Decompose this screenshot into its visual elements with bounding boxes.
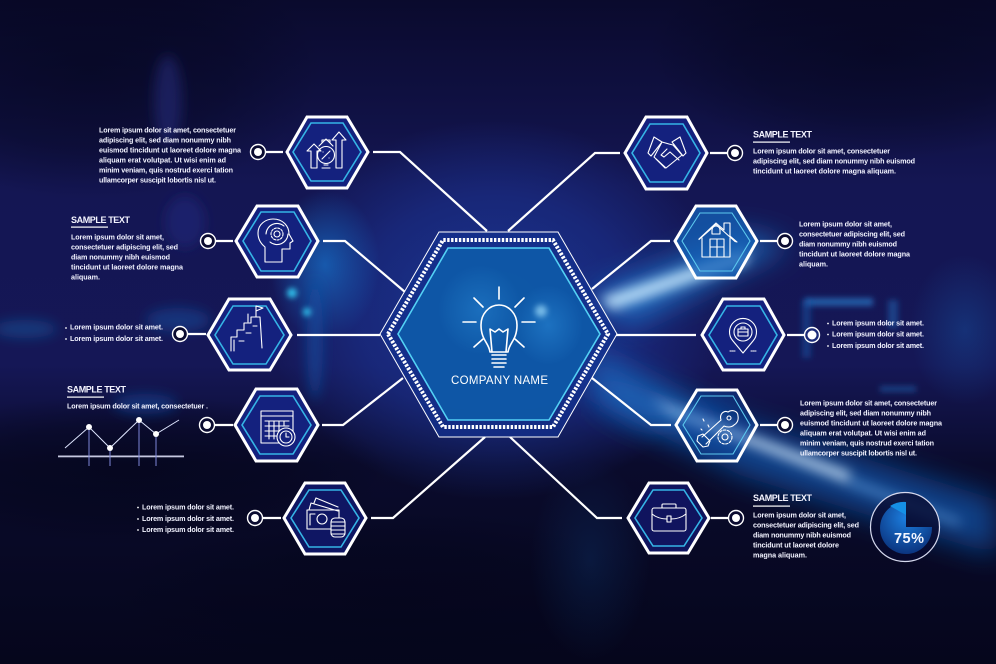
text block: right 5 — [753, 493, 859, 560]
icon: banknotes and coins — [307, 498, 345, 537]
text block: right 5: magna aliquam. — [753, 550, 807, 560]
icon: handshake — [648, 137, 686, 168]
text block: right 4: adipiscing elit, sed diam nonummy nibh — [800, 408, 931, 418]
text block: right 2: consectetuer adipiscing elit, sed — [799, 230, 905, 238]
text block: right 1: adipiscing elit, sed diam nonummy nibh euismod — [753, 156, 915, 166]
text block: left 4: Lorem ipsum dolor sit amet, consectetuer . — [67, 402, 208, 410]
node: key and gear, right 4 — [676, 390, 792, 461]
node: handshake, right 1 — [625, 117, 742, 189]
text block: left 2: SAMPLE TEXT — [71, 215, 130, 225]
icon: location pin with briefcase — [730, 318, 756, 353]
text block: right 2: diam nonummy nibh euismod — [799, 240, 897, 248]
text block: left 2: Lorem ipsum dolor sit amet, — [71, 232, 164, 242]
text block: right 5: diam nonummy nibh euismod — [753, 530, 851, 540]
text block: left 1: ullamcorper suscipit lobortis nisl ut. — [99, 176, 216, 184]
pie chart: 75%: 75% — [894, 531, 924, 547]
text block: left 2: tincidunt ut laoreet dolore magna — [71, 262, 184, 272]
text block: right 4: Lorem ipsum dolor sit amet, consectetuer — [800, 398, 937, 408]
text block: right 2: aliquam. — [799, 260, 828, 268]
text block: right 1: SAMPLE TEXT — [753, 130, 812, 140]
text block: right 2: Lorem ipsum dolor sit amet, — [799, 220, 892, 228]
text block: right 2: tincidunt ut laoreet dolore magna — [799, 250, 911, 258]
text block: left 1: Lorem ipsum dolor sit amet, consectetuer — [99, 126, 236, 134]
text block: left 2: diam nonummy nibh euismod — [71, 252, 170, 262]
icon: briefcase — [652, 504, 686, 531]
node: location pin, right 3 — [702, 299, 820, 370]
text block: right 1 — [753, 130, 915, 176]
icon: head with gear — [258, 219, 293, 262]
company name: COMPANY NAME — [451, 375, 548, 387]
icon: stairs with flag — [231, 306, 263, 351]
icon: key, gear and sparkles — [697, 411, 738, 447]
text block: right 1: tincidunt ut laoreet dolore magna aliquam. — [753, 166, 896, 176]
node: briefcase, right 5 — [628, 483, 744, 553]
text block: left 1: aliquam erat volutpat. Ut wisi enim ad — [99, 156, 226, 164]
text block: right 5: SAMPLE TEXT — [753, 493, 812, 503]
text block: right 5: consectetuer adipiscing elit, sed — [753, 520, 859, 530]
text block: left 2: aliquam. — [71, 272, 100, 282]
text block: left 4: SAMPLE TEXT — [67, 384, 126, 394]
connector lines — [297, 152, 696, 518]
bullet list: left 3: Lorem ipsum dolor sit amet. — [70, 322, 163, 332]
bullet list: right 3: Lorem ipsum dolor sit amet. — [832, 318, 924, 328]
text block: right 4: euismod tincidunt ut laoreet dolore magna — [800, 418, 943, 428]
text block: right 1: Lorem ipsum dolor sit amet, consectetuer — [753, 146, 890, 156]
text block: right 4: aliquam erat volutpat. Ut wisi enim ad — [800, 428, 926, 438]
bullet list: left 5 — [137, 502, 234, 534]
bullet list: left 3: Lorem ipsum dolor sit amet. — [70, 334, 163, 343]
text block: left 1: minim veniam, quis nostrud exerci tation — [99, 166, 233, 174]
bullet list: left 3 — [65, 322, 163, 343]
node: money, left 5 — [248, 483, 366, 554]
bullet list: left 5: Lorem ipsum dolor sit amet. — [142, 514, 234, 523]
text block: left 4 — [67, 384, 208, 410]
bullet list: left 5: Lorem ipsum dolor sit amet. — [142, 502, 234, 512]
text block: left 2 — [71, 215, 184, 282]
icon: house — [699, 223, 737, 257]
text block: right 2 — [799, 220, 911, 268]
node: calendar, left 4 — [200, 389, 318, 461]
node: stairs, left 3 — [172, 299, 291, 370]
text block: left 1 — [99, 126, 242, 184]
text block: right 4: minim veniam, quis nostrud exerci tation — [800, 438, 934, 448]
text block: left 1: euismod tincidunt ut laoreet dolore magna — [99, 146, 242, 154]
text block: right 5: Lorem ipsum dolor sit amet, — [753, 510, 846, 520]
icon: light bulb — [463, 287, 535, 367]
icon: calendar and clock — [261, 411, 295, 446]
icon: growth arrows — [307, 132, 346, 168]
central hexagon — [380, 232, 617, 437]
node: head and gear, left 2 — [200, 206, 318, 277]
bullet list: right 3: Lorem ipsum dolor sit amet. — [832, 341, 924, 350]
text block: left 2: consectetuer adipiscing elit, sed — [71, 242, 178, 252]
node: house, right 2 — [675, 206, 792, 278]
bullet list: left 5: Lorem ipsum dolor sit amet. — [142, 525, 234, 534]
node: growth, left 1 — [250, 117, 368, 188]
line chart — [58, 417, 184, 466]
text block: right 5: tincidunt ut laoreet dolore — [753, 540, 839, 550]
text block: right 4 — [800, 398, 943, 458]
text block: right 4: ullamcorper suscipit lobortis nisl ut. — [800, 448, 917, 458]
bullet list: right 3 — [827, 318, 924, 350]
text block: left 1: adipiscing elit, sed diam nonummy nibh — [99, 136, 231, 144]
bullet list: right 3: Lorem ipsum dolor sit amet. — [832, 330, 924, 338]
pie chart: 75% — [870, 492, 940, 562]
